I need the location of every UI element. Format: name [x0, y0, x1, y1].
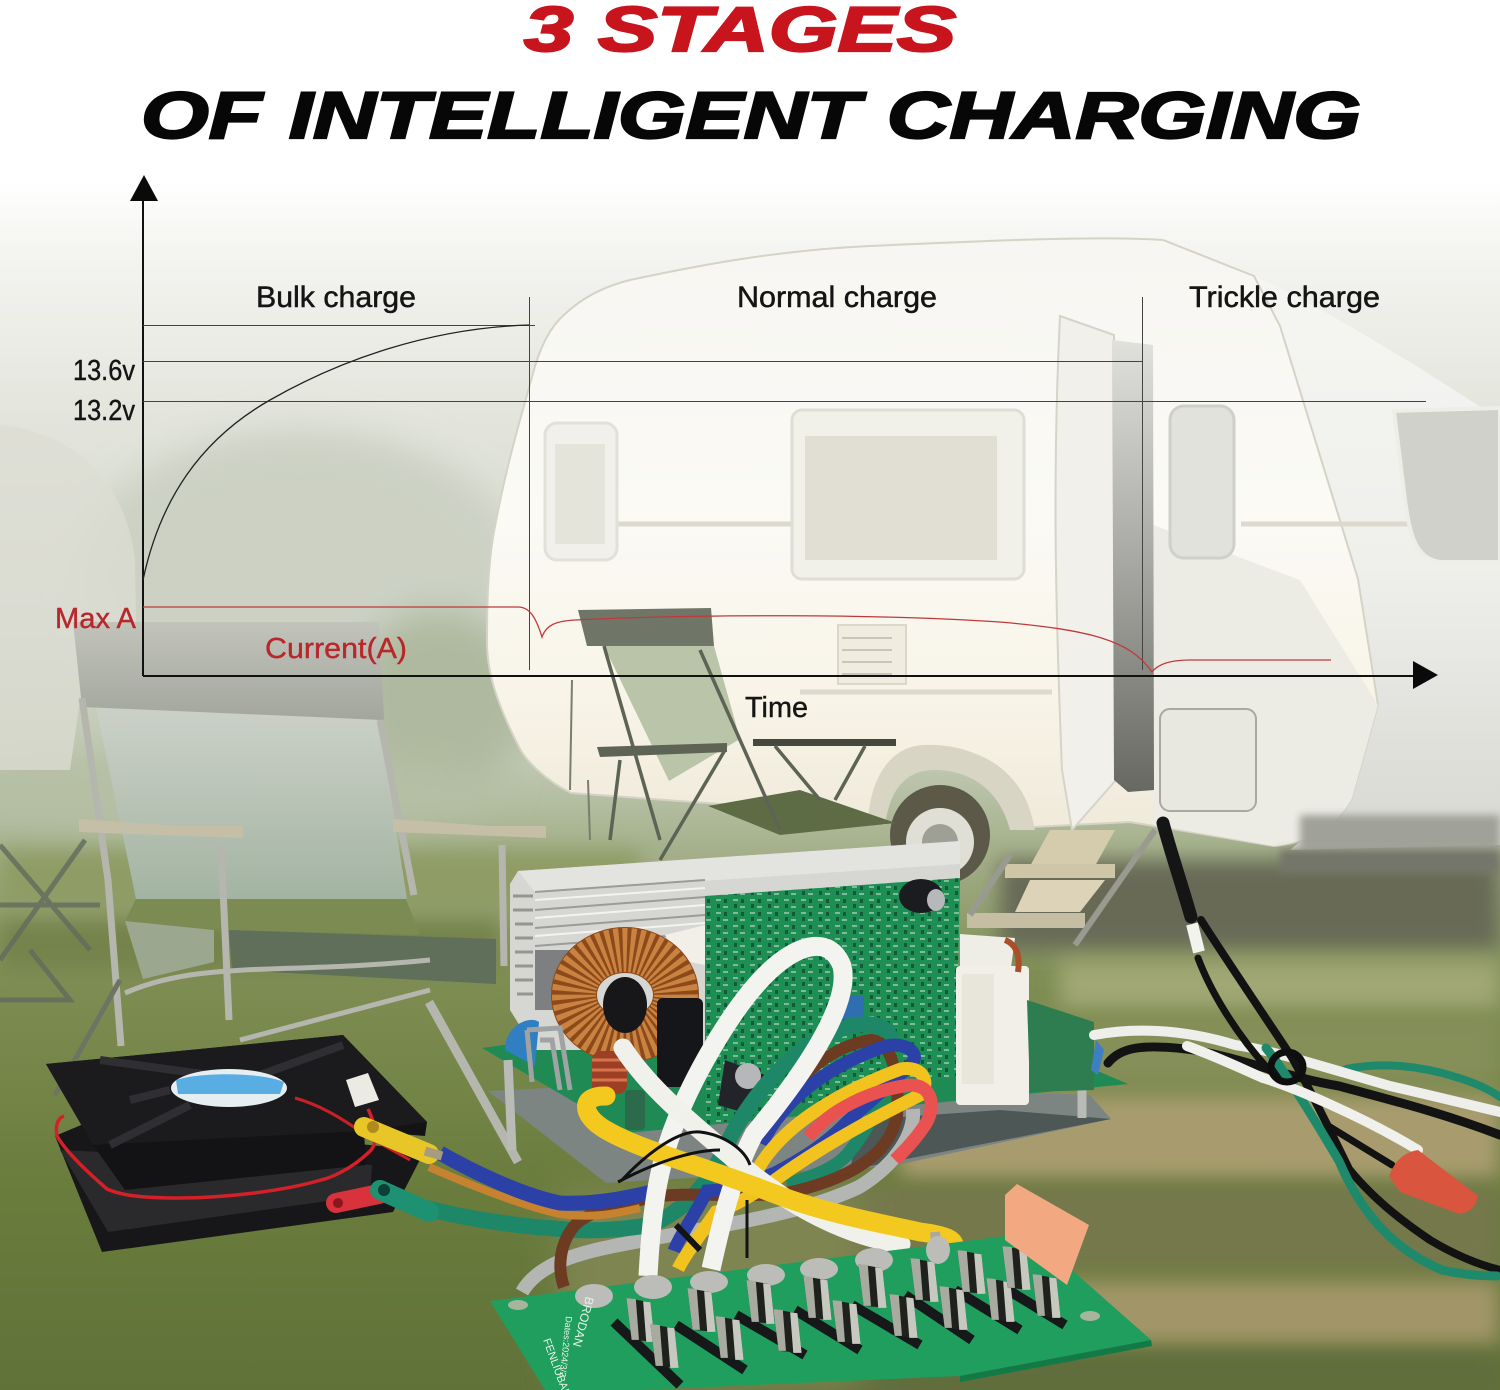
- voltage labels: 13.2v: [73, 395, 135, 427]
- stage dividers and voltage lines: [143, 297, 1426, 670]
- stage labels: Normal charge: [737, 281, 937, 314]
- blue capacitor and heat pipes: [505, 1020, 570, 1090]
- main yellow wire: [586, 1096, 954, 1246]
- background: centre camping chair and table: [570, 608, 896, 860]
- small copper coil: [592, 1051, 627, 1094]
- green wire: [380, 1024, 891, 1230]
- title: [141, 0, 1361, 152]
- green capacitor block: [1027, 1000, 1094, 1092]
- grass, dirt and shadow bands: [0, 850, 640, 910]
- voltage labels: [73, 355, 135, 427]
- black cable ties: [618, 1132, 750, 1182]
- fuse board: [490, 1184, 1152, 1390]
- wheel arch and tyre: [868, 745, 1035, 885]
- red wire: [808, 1085, 931, 1160]
- x axis: [143, 661, 1438, 689]
- stand-offs: [508, 1060, 1082, 1150]
- black fuse holders: [614, 1285, 1065, 1385]
- armrests: [79, 819, 243, 838]
- service hatch: [1160, 709, 1256, 811]
- window: left: [545, 423, 617, 560]
- y axis: [130, 175, 158, 676]
- second yellow wire: [678, 1068, 925, 1269]
- white relay: [956, 934, 1029, 1105]
- screw terminals: [575, 1236, 950, 1308]
- fan wires: [56, 1109, 375, 1198]
- window: right: [1394, 408, 1500, 562]
- door: [1056, 316, 1116, 830]
- current labels: Current(A): [265, 633, 407, 665]
- second white wire: [623, 1048, 901, 1244]
- board print: [540, 1295, 597, 1390]
- base plate: [488, 1080, 1111, 1183]
- fan connector: [346, 1073, 379, 1107]
- steps: [967, 830, 1155, 945]
- title line 2: OF INTELLIGENT CHARGING: [141, 78, 1361, 152]
- board print: Dates:2024/3/2: [558, 1316, 574, 1378]
- tree haze: [0, 430, 530, 830]
- voltage curve: [143, 325, 529, 580]
- orange blade fuse: [1005, 1184, 1089, 1285]
- main circuit board: [705, 878, 960, 1126]
- lower body right part: [1153, 525, 1378, 846]
- current curve: [143, 607, 1331, 672]
- heat sink: [510, 841, 960, 1050]
- chart: three stage charging curve: [55, 175, 1438, 724]
- blue wire: [440, 1045, 914, 1251]
- lower board: [482, 1040, 1128, 1133]
- blade terminals: [626, 1246, 1061, 1368]
- orange wire: [429, 1167, 640, 1216]
- background: trailer at left: [0, 425, 137, 770]
- vent: [838, 625, 906, 684]
- body stripes: [617, 524, 1423, 692]
- underbody: [1300, 815, 1500, 850]
- board print: BRODAN: [570, 1295, 597, 1348]
- brown wire: [560, 1040, 898, 1287]
- door gap: [1112, 340, 1154, 792]
- green board: [490, 1233, 1151, 1390]
- current labels: [55, 603, 407, 665]
- stage labels: Bulk charge: [256, 281, 416, 314]
- background: caravan: [487, 238, 1500, 945]
- window: door: [1170, 406, 1234, 558]
- side table: [0, 840, 100, 1000]
- mounting holes: [508, 1300, 1100, 1321]
- white connector: [665, 925, 705, 965]
- voltage labels: 13.6v: [73, 355, 135, 387]
- black capacitors: [657, 998, 765, 1115]
- red wire nut: [1389, 1150, 1477, 1214]
- copper toroid: [574, 950, 676, 1040]
- stage labels: Trickle charge: [1189, 281, 1380, 314]
- window: centre: [792, 410, 1024, 579]
- background: left camping chair: [0, 622, 546, 1162]
- right AC wiring harness: [1094, 823, 1500, 1276]
- cooling fan: [46, 1035, 427, 1252]
- charger unit: [482, 841, 1128, 1183]
- capacitor on board: [899, 879, 945, 913]
- white looped wire: [648, 946, 843, 1276]
- wire end caps: [333, 1121, 938, 1262]
- grey wire: [522, 1109, 913, 1292]
- current labels: Max A: [55, 603, 137, 635]
- fan hub label: [171, 1069, 287, 1107]
- time label: Time: [745, 692, 808, 724]
- stage labels: [256, 281, 1380, 314]
- centre coloured wire bundle: [380, 946, 954, 1292]
